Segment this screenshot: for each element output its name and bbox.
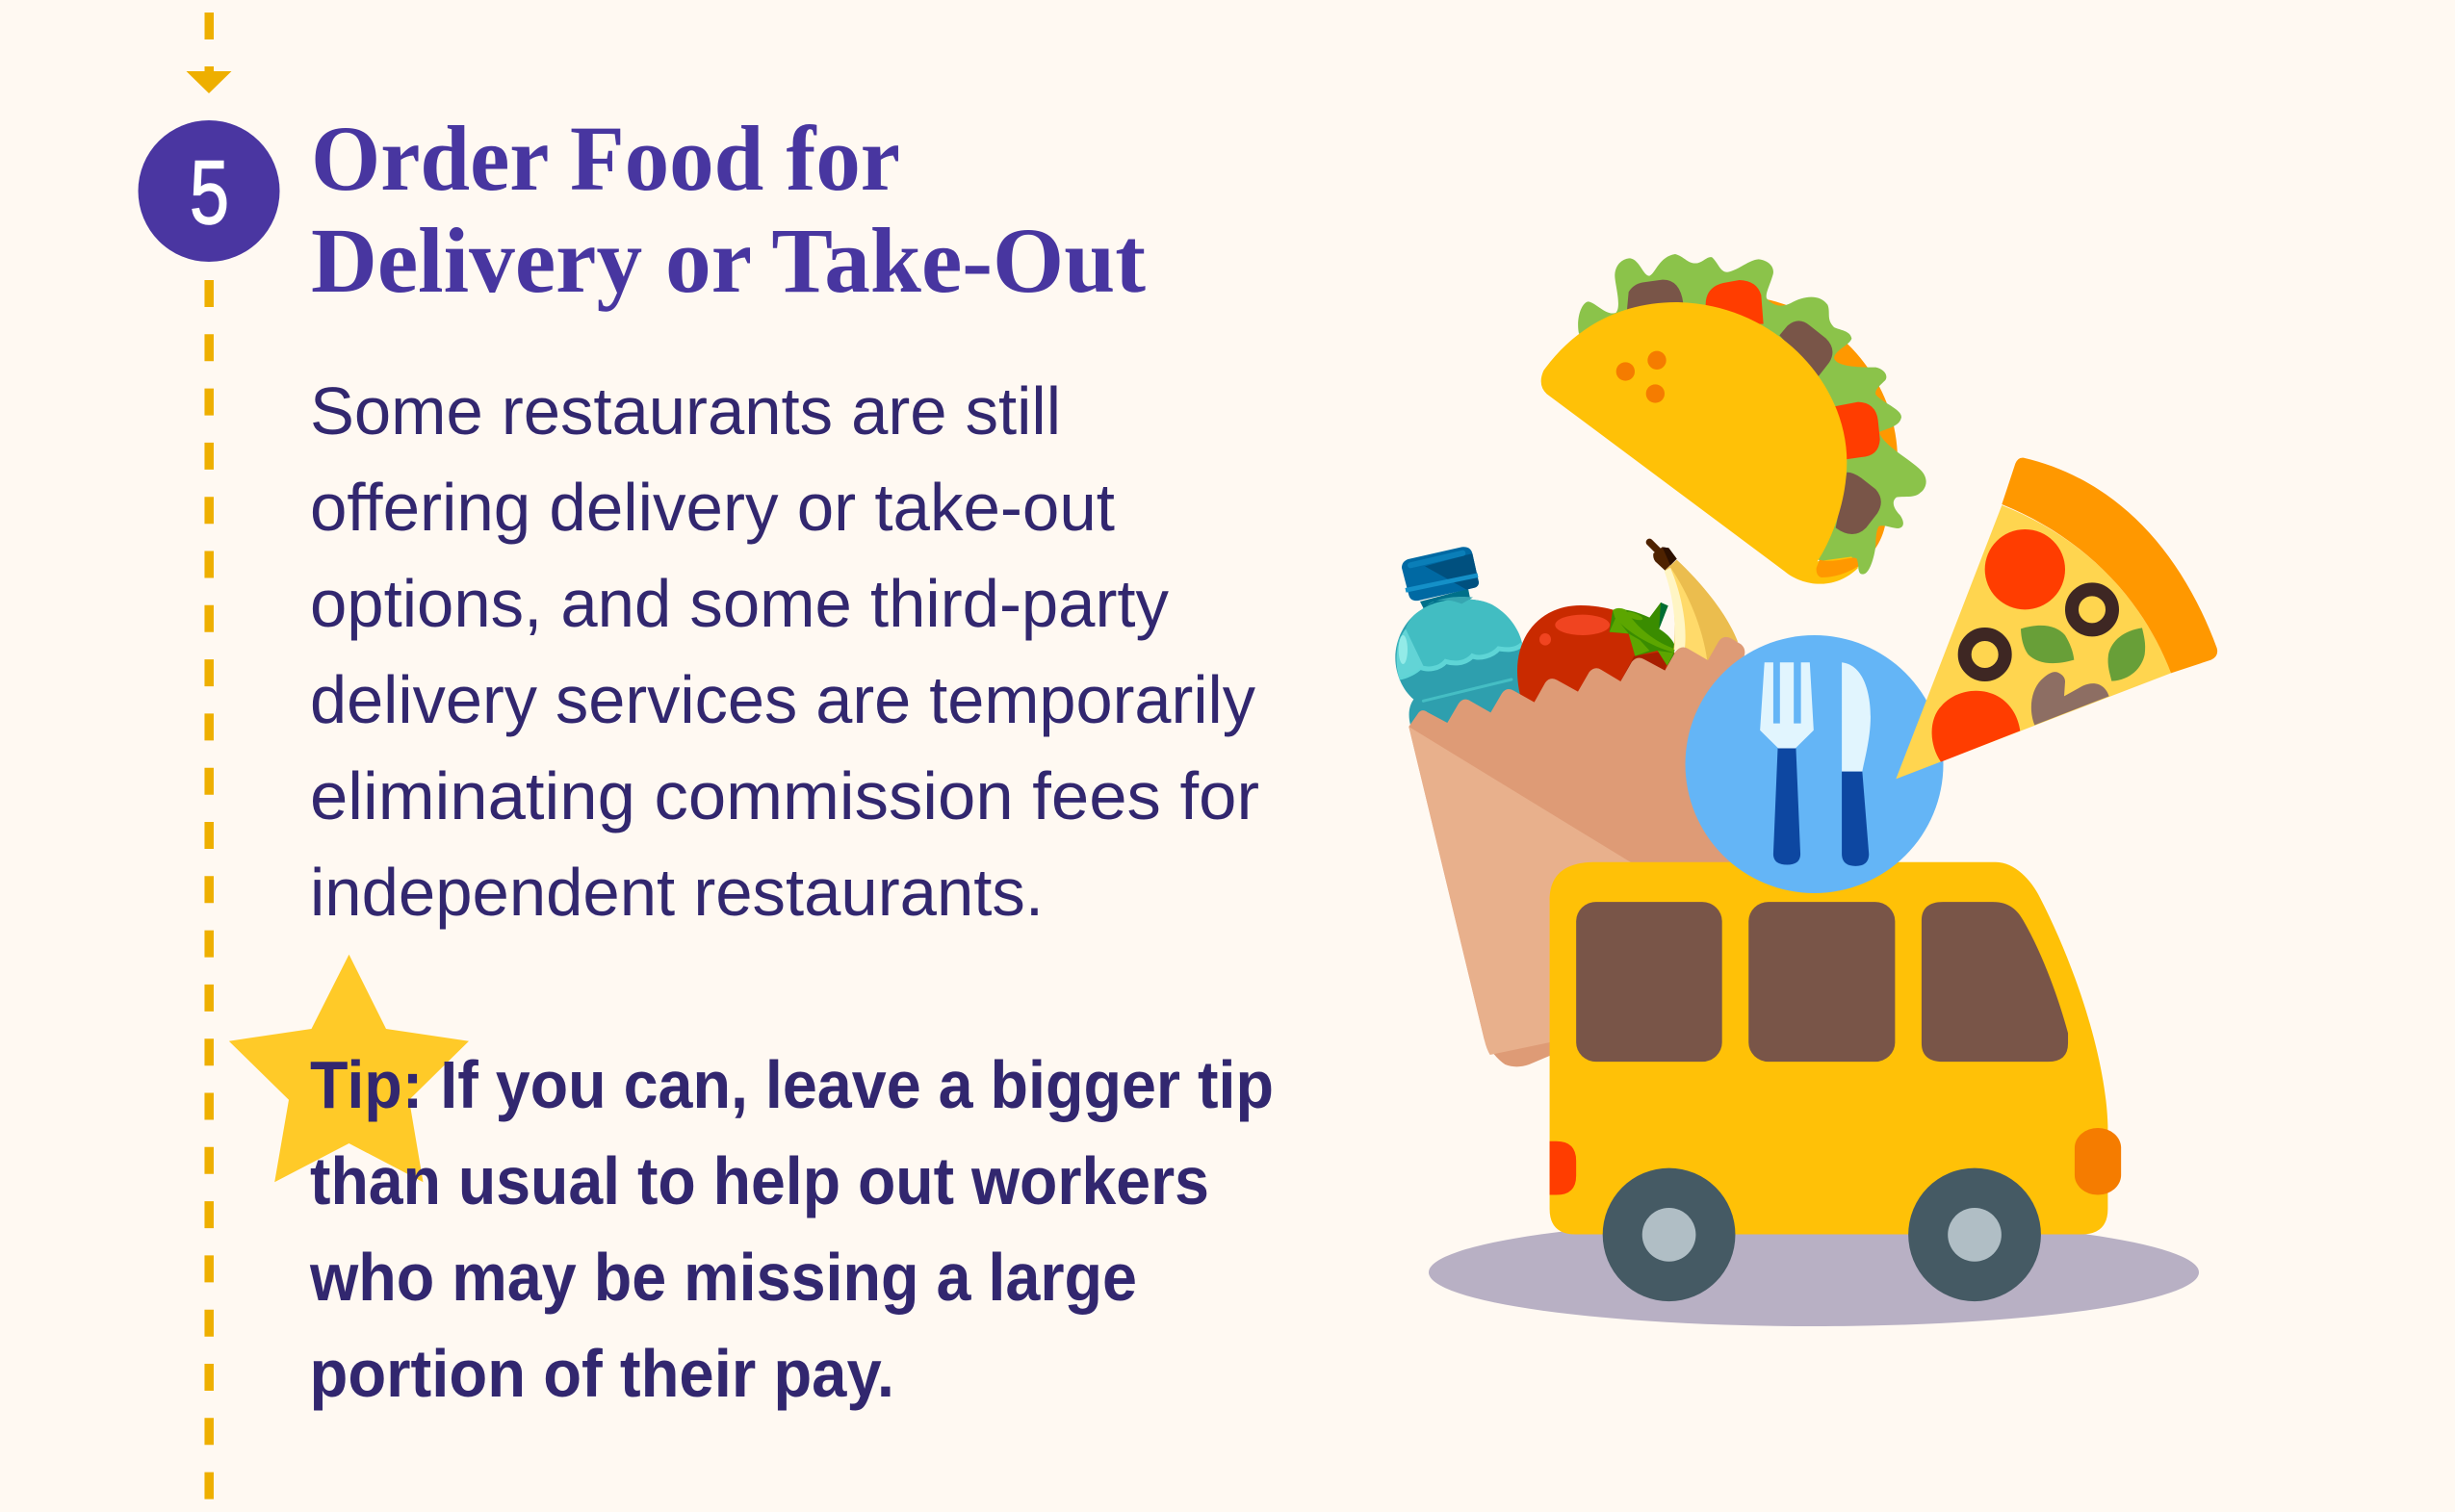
lights: [1550, 1128, 2121, 1195]
body text: eliminating commission fees for: [310, 758, 1259, 833]
tip text: portion of their pay.: [310, 1336, 894, 1411]
step number badge: 5: [190, 141, 229, 243]
title: Order Food for: [311, 107, 900, 210]
icon: tip star: [229, 955, 469, 1182]
bus: [1550, 862, 2121, 1301]
step number badge: [139, 120, 279, 262]
tomato: [1517, 602, 1675, 709]
title: [311, 107, 1146, 312]
body text: delivery services are temporarily: [310, 662, 1255, 737]
body text: options, and some third-party: [310, 566, 1169, 641]
groceries and bag: [1395, 542, 1755, 1066]
title: Delivery or Take-Out: [311, 209, 1146, 312]
wheels: [1603, 1168, 2041, 1301]
body text: [310, 373, 1259, 930]
water bottle: [1395, 547, 1523, 729]
body text: independent restaurants.: [310, 855, 1044, 930]
dashed timeline with arrow: [187, 13, 231, 1501]
paper bag: [1408, 637, 1755, 1066]
taco: [1541, 254, 1926, 584]
banana: [1649, 542, 1738, 661]
tip text: [309, 1047, 1274, 1411]
illustration: delivery bus with food: [1395, 254, 2217, 1326]
body text: offering delivery or take-out: [310, 470, 1115, 545]
ground shadow: [1429, 1218, 2199, 1326]
icon: fork and knife badge: [1685, 635, 1943, 893]
body text: Some restaurants are still: [310, 373, 1061, 448]
tip text: Tip: If you can, leave a bigger tip: [310, 1047, 1274, 1122]
tip text: than usual to help out workers: [310, 1143, 1209, 1218]
windows: [1576, 902, 2068, 1062]
tip text: who may be missing a large: [309, 1240, 1137, 1315]
pizza slice: [1896, 458, 2217, 779]
